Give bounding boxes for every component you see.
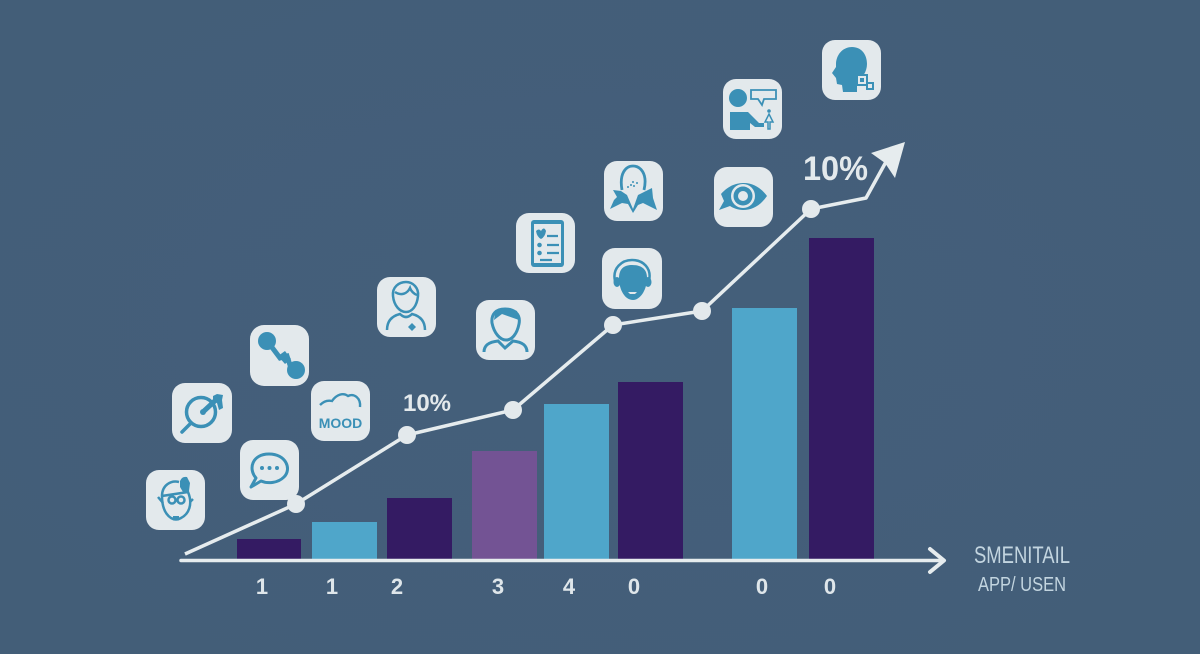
icon: target: [172, 383, 232, 443]
bar chart: [237, 238, 874, 559]
axis label: SMENITAIL: [974, 542, 1070, 569]
icon: headset head: [602, 248, 662, 309]
x axis numbers: 2: [391, 574, 403, 599]
icon: speech bubble: [240, 440, 299, 500]
x axis numbers: 1: [326, 574, 338, 599]
icon: eye: [714, 167, 773, 227]
x axis numbers: 1: [256, 574, 268, 599]
icon: mood: [311, 381, 370, 441]
x axis numbers: 3: [492, 574, 504, 599]
x axis arrow: [181, 549, 944, 572]
icon: tablet checklist: [516, 213, 575, 273]
icon: presenter: [723, 79, 782, 139]
icon: connected nodes: [250, 325, 309, 386]
x axis numbers: 4: [563, 574, 576, 599]
icon: face with glasses: [146, 470, 205, 530]
x axis numbers: 0: [628, 574, 640, 599]
axis label: [974, 542, 1070, 596]
x axis numbers: 0: [824, 574, 836, 599]
label: 10% mid: 10%: [403, 390, 451, 417]
x axis numbers: 0: [756, 574, 768, 599]
icon: man portrait: [476, 300, 535, 360]
icon: head profile with boxes: [822, 40, 881, 100]
trend line with arrow: [185, 142, 905, 554]
icon: mood: MOOD: [319, 415, 362, 431]
axis label: APP/ USEN: [978, 574, 1066, 596]
x axis numbers: [256, 574, 836, 599]
icon: brain with open book: [604, 161, 663, 221]
label: 10% top: 10%: [803, 150, 868, 188]
icon: doctor: [377, 277, 436, 337]
